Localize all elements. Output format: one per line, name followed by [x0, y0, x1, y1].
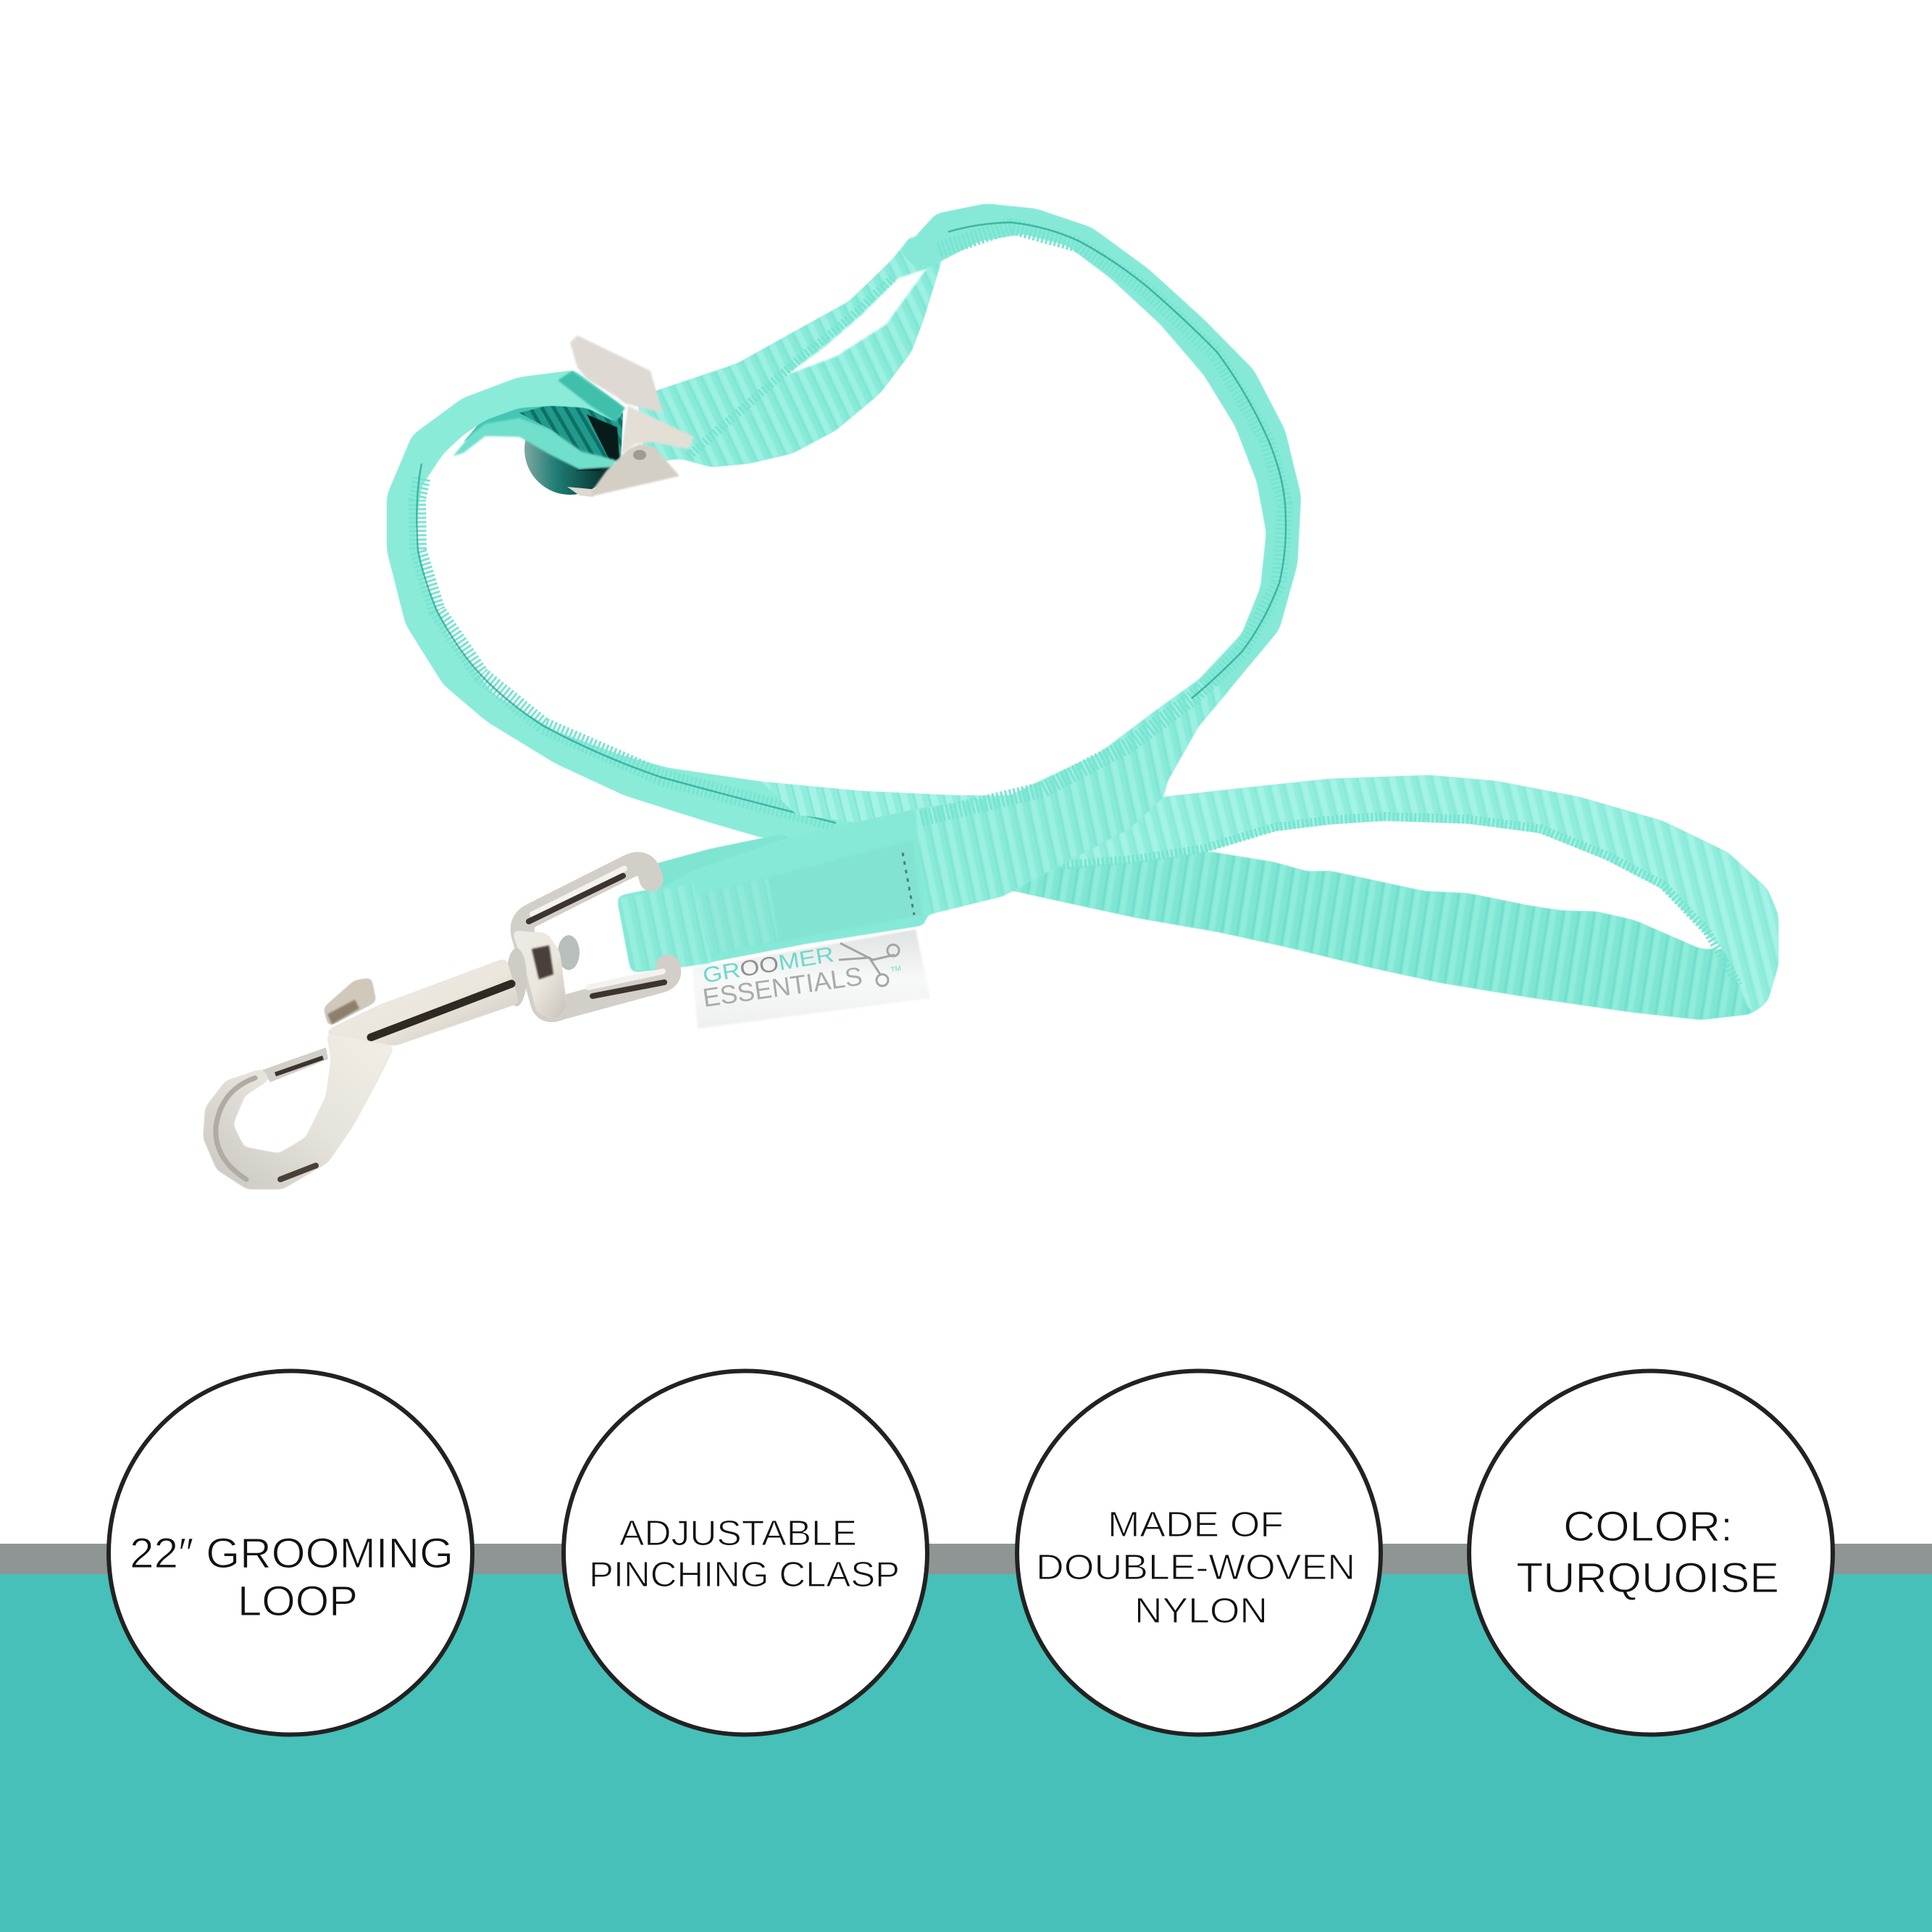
- hook: shaft reflection: [371, 984, 511, 1037]
- hook: thumb latch: [323, 977, 377, 1027]
- strap: right limb, crossing and tab: [616, 204, 1301, 973]
- caption: COLOR:: [1563, 1503, 1733, 1550]
- hook: gate reflection: [275, 1058, 323, 1074]
- hook: body reflection: [280, 1166, 316, 1179]
- strap: ribbed section near crossing: [916, 680, 1229, 915]
- label: scissors logo: [839, 943, 899, 986]
- strap tab: stitch line: [903, 853, 914, 915]
- clasp: upper tab: [570, 335, 663, 413]
- hook: ring dark reflections: [529, 876, 664, 996]
- feature circle: double-woven nylon: [1017, 1371, 1381, 1734]
- strap tab: patch ribs: [693, 878, 779, 954]
- hook: ring highlights: [532, 869, 663, 987]
- left limb: seam line: [417, 464, 836, 823]
- caption line 2: PINCHING CLASP: [589, 1555, 900, 1594]
- clasp: lower triangle: [592, 444, 679, 496]
- left limb: stitched border: [417, 478, 836, 823]
- clasp: rivet: [633, 450, 646, 460]
- strap: fold behind swivel ring: [648, 833, 797, 898]
- caption line 2: LOOP: [238, 1578, 358, 1625]
- upper limb webbing to clasp: [637, 235, 945, 467]
- label: GROOMER wordmark: GROOMER: [701, 942, 836, 988]
- hook: square swivel ring: [522, 864, 669, 1010]
- webbing fold: inner shadow band: [464, 400, 558, 442]
- clasp: middle jaw: [621, 406, 694, 454]
- hook: shaft: [326, 958, 519, 1046]
- snap hook: [203, 864, 669, 1189]
- hook: swivel reflection: [532, 945, 553, 979]
- brand label: [693, 929, 930, 1029]
- caption: ADJUSTABLE: [619, 1514, 857, 1553]
- webbing fold: lower band: [453, 418, 616, 469]
- clasp: silver lip under disc: [567, 487, 598, 497]
- strap: right limb stitched border: [920, 226, 1285, 819]
- handle loop: upper band: [1036, 775, 1778, 1014]
- hook: gate bar: [262, 1047, 328, 1082]
- caption line 2: DOUBLE-WOVEN: [1036, 1548, 1355, 1587]
- product photo: turquoise grooming loop: [203, 204, 1778, 1189]
- upper limb: stitched edge: [688, 278, 892, 456]
- caption: MADE OF: [1108, 1505, 1284, 1544]
- webbing fold: black shadow: [576, 414, 619, 471]
- strap tab: stitched patch: [693, 840, 922, 954]
- clasp: dark metal disc: [524, 403, 616, 495]
- handle loop: lower band: [978, 848, 1768, 1020]
- background: grey band: [0, 1544, 1932, 1574]
- left limb: upper ribbing: [761, 782, 1011, 822]
- feature circle: adjustable pinching clasp: [564, 1371, 927, 1734]
- hook: rivet: [558, 935, 580, 970]
- circle outline: [1017, 1371, 1381, 1734]
- pinching clasp: [570, 335, 694, 496]
- circle outline: [564, 1371, 927, 1734]
- circle outline: [109, 1371, 472, 1734]
- hook: body: [203, 1032, 395, 1189]
- feature circle: 22" grooming loop: [109, 1371, 472, 1734]
- label: white tag: [693, 929, 930, 1029]
- label: ESSENTIALS wordmark: ESSENTIALS: [701, 961, 864, 1013]
- feature circle: color turquoise: [1469, 1371, 1833, 1734]
- hook: swivel block: [511, 930, 567, 1020]
- left limb of strap: [387, 370, 1011, 846]
- strap: right limb seam line: [948, 222, 1286, 698]
- strap tab: end ribs: [619, 884, 712, 971]
- upper limb: white gap between layers: [786, 269, 927, 375]
- webbing fold: dark ribs: [519, 404, 623, 464]
- caption: 22″ GROOMING: [130, 1530, 453, 1577]
- caption line 3: NYLON: [1134, 1592, 1268, 1631]
- webbing fold: upper dark edge: [558, 371, 625, 422]
- background: teal panel: [0, 1574, 1932, 1932]
- hook: collar: [506, 948, 527, 1006]
- hook: latch shadow: [327, 1000, 359, 1024]
- handle loop: inner stitched edge: [1058, 816, 1739, 985]
- label: trademark: TM: [890, 965, 902, 974]
- hook: rim shading: [216, 1078, 255, 1179]
- caption line 2: TURQUOISE: [1516, 1555, 1779, 1602]
- circle outline: [1469, 1371, 1833, 1734]
